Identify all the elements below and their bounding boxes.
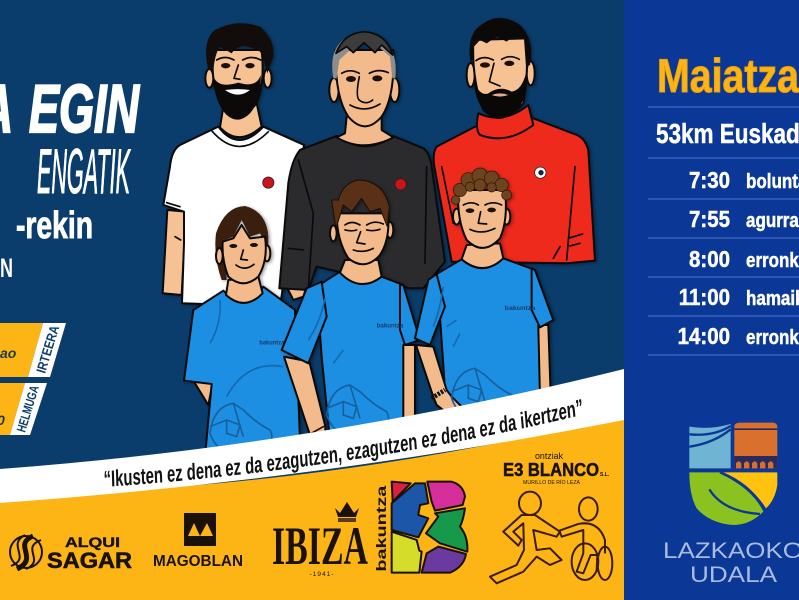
- timetable: 8:00: [689, 246, 730, 272]
- logo: Bakuntza: [373, 482, 467, 573]
- logo: Bakuntza: bakuntza: [373, 485, 389, 572]
- logo: E3 Blanco: S.L.: [600, 472, 610, 478]
- child: left: [184, 206, 301, 457]
- main title: EGIN: [29, 71, 140, 147]
- timetable: 7:30: [689, 167, 730, 193]
- child: right: [415, 168, 553, 418]
- quote text: “Ikusten ez dena ez da ezagutzen, ezagutzen ez dena ez da ikertzen”: [104, 399, 582, 486]
- timetable: 14:00: [678, 323, 730, 349]
- logo: Ibiza: IBIZA: [272, 516, 368, 576]
- yellow sponsor area: [0, 415, 624, 600]
- tag: start: IRTEERA: [34, 323, 62, 375]
- logo: E3 Blanco: ontziak: [535, 451, 563, 462]
- tag: finish: HELMUGA: [14, 383, 42, 434]
- tag: start: [0, 323, 66, 377]
- tag: finish: [0, 383, 47, 435]
- adult: black long sleeve: [279, 32, 445, 300]
- icon: runner helping wheelchair user: [490, 492, 612, 583]
- logo: Alqui Sagar: SAGAR: [47, 548, 132, 573]
- logo: Ibiza: [272, 502, 368, 578]
- timetable: 11:00: [679, 284, 730, 310]
- schedule panel: [624, 0, 799, 600]
- timetable: [678, 167, 799, 349]
- rekin line: -rekin: [16, 205, 93, 247]
- white quote band: [0, 369, 624, 503]
- timetable: agurra: [746, 209, 799, 231]
- logo: Lazkaoko Udala: LAZKAOKO: [663, 538, 799, 563]
- child: right: bakuntza: [505, 305, 536, 312]
- child: centre: bakuntza: [377, 323, 404, 330]
- logo: Magoblan: [153, 513, 243, 570]
- infographic canvas: ENGATIK: [37, 137, 131, 207]
- logo: Ibiza: -1941-: [310, 571, 334, 578]
- schedule lines: [648, 107, 799, 355]
- adult: white t-shirt: [163, 23, 304, 307]
- child: centre: [282, 180, 420, 440]
- main title: [0, 71, 140, 147]
- logo: E3 Blanco: [503, 451, 610, 486]
- logo: Lazkaoko Udala: [663, 423, 799, 587]
- logo: Alqui Sagar: [10, 534, 132, 573]
- child: left: bakuntza: [259, 340, 285, 347]
- cropped line: N: [0, 253, 13, 283]
- logo: Alqui Sagar: ALQUI: [65, 534, 120, 550]
- logo: E3 Blanco: E3 BLANCO: [503, 460, 599, 480]
- logo: Lazkaoko Udala: UDALA: [690, 562, 777, 587]
- logo: Magoblan: MAGOBLAN: [153, 553, 243, 570]
- logo: E3 Blanco: MURILLO DE RÍO LEZA: [523, 479, 581, 486]
- adult: red turtleneck: [434, 18, 595, 263]
- tag: start: ao: [0, 345, 17, 361]
- timetable: 7:55: [689, 206, 730, 232]
